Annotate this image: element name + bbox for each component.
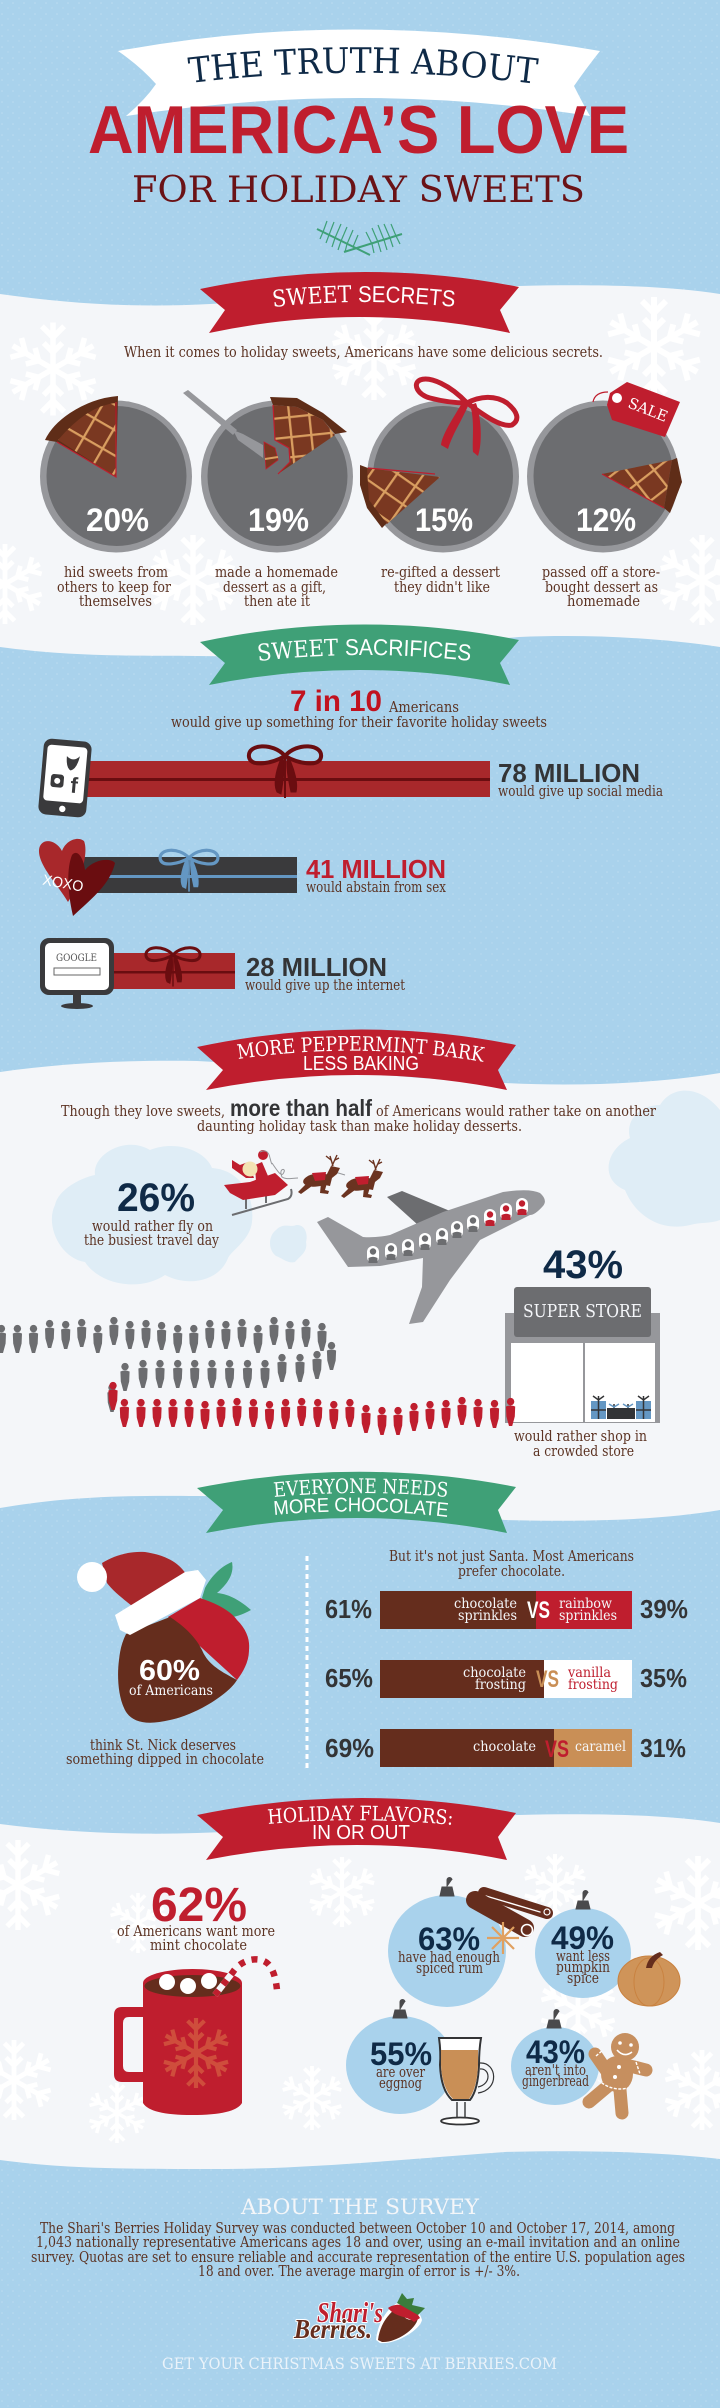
stat: 19% pie with fork — [183, 390, 353, 610]
stat: 43% store: would rather shop in — [514, 1429, 647, 1445]
bow — [146, 948, 200, 986]
intro text: more than half: daunting holiday task than make holiday desserts. — [197, 1119, 522, 1135]
caption: themselves — [79, 594, 152, 610]
comparison: caramel: VS — [545, 1736, 569, 1763]
stat: 26% fly: would rather fly on — [92, 1219, 213, 1235]
caption: dipped in chocolate: something dipped in chocolate — [66, 1752, 264, 1768]
title line 2: AMERICA’S LOVE — [88, 92, 629, 168]
mug snowflake — [161, 2018, 231, 2088]
ornament: 43% gingerbread: 43% — [526, 2034, 585, 2070]
gift bar — [112, 953, 235, 989]
ornament: 49% pumpkin spice: 49% — [551, 1920, 614, 1956]
ornament: 49% pumpkin spice: spice — [567, 1971, 599, 1987]
banner: sweet sacrifices — [200, 624, 519, 685]
ornament: 49% pumpkin spice: want less — [556, 1949, 610, 1965]
call to action: GET YOUR CHRISTMAS SWEETS AT BERRIES.COM — [162, 2354, 557, 2373]
upper wing — [387, 1191, 450, 1225]
intro text: sweet secrets: When it comes to holiday sweets, Americans have some delicious secrets. — [124, 345, 603, 361]
ornament: 49% pumpkin spice: pumpkin — [556, 1960, 610, 1976]
stat: 62% mint chocolate — [117, 1879, 275, 1954]
comparison: frosting: frosting — [475, 1677, 526, 1693]
description: would give up the internet — [245, 978, 405, 994]
value: 78 MILLION — [498, 758, 640, 788]
icon: airplane — [317, 1190, 545, 1324]
intro text: more than half — [61, 1095, 656, 1135]
comparison: sprinkles: chocolate — [454, 1596, 517, 1612]
icon: sale tag: SALE — [626, 394, 670, 426]
title line 3: FOR HOLIDAY SWEETS — [132, 170, 585, 211]
gift bar — [83, 857, 297, 893]
about the survey — [31, 2195, 685, 2280]
candy cane — [215, 1959, 277, 1995]
comparison: frosting — [325, 1660, 687, 1698]
ornament: 55% eggnog: are over — [376, 2065, 425, 2081]
stat: 26% fly: 26% — [117, 1176, 195, 1220]
logo: Shari's Berries — [293, 2293, 425, 2344]
icon: super store — [505, 1287, 660, 1423]
banner: sweet secrets — [200, 272, 519, 333]
comparison intro: But it's not just Santa. Most Americans — [389, 1549, 634, 1565]
stat: 43% store: 43% — [543, 1243, 623, 1287]
pie plate — [201, 400, 353, 552]
caption — [215, 565, 338, 610]
comparison intro — [389, 1549, 634, 1580]
ornament: 43% gingerbread: gingerbread — [522, 2074, 589, 2090]
comparison intro: prefer chocolate. — [458, 1564, 565, 1580]
comparison: caramel: 69% — [325, 1733, 374, 1763]
icon: mug of cocoa — [114, 1959, 277, 2115]
heading: ABOUT THE SURVEY — [240, 2195, 480, 2219]
comparison: sprinkles: sprinkles — [559, 1608, 617, 1624]
icon: fork — [183, 390, 263, 458]
bow — [160, 850, 218, 892]
percentage: 20% — [86, 502, 149, 538]
crowd: red line of shoppers — [108, 1382, 515, 1435]
gifts — [591, 1396, 651, 1419]
comparison: frosting: frosting — [568, 1677, 618, 1693]
white title ribbon — [118, 30, 600, 116]
stat: 20% pie — [40, 396, 192, 610]
value: 28 MILLION — [246, 952, 387, 982]
comparison: sprinkles: rainbow — [559, 1596, 612, 1612]
caption: dessert as a gift, — [223, 580, 326, 596]
percentage: 12% — [576, 502, 636, 538]
bow — [249, 746, 321, 798]
banner line 1: EVERYONE NEEDS — [274, 1478, 447, 1497]
icon: hearts — [39, 839, 115, 916]
banner line 2: MORE CHOCOLATE — [274, 1498, 448, 1517]
icon: pumpkin — [618, 1952, 680, 2006]
caption: hid sweets from — [64, 565, 168, 581]
bar: 28 million internet — [40, 938, 405, 1009]
intro text: more than half: more than half — [230, 1095, 372, 1121]
icon: gingerbread man — [589, 2033, 646, 2113]
banner: holiday flavors — [197, 1798, 516, 1860]
icon: smartphone: f — [69, 773, 79, 798]
stat: 62% mint chocolate: mint chocolate — [150, 1938, 247, 1954]
pie slice — [602, 458, 682, 513]
icon: chocolate strawberry with santa hat — [77, 1552, 251, 1723]
ornament: 43% gingerbread: aren't into — [525, 2063, 586, 2079]
icon: smartphone — [38, 738, 92, 818]
icon: monitor: GOOGLE — [56, 953, 97, 964]
logo: Shari's Berries: Berries. — [293, 2314, 372, 2344]
caption: they didn't like — [394, 580, 490, 596]
chocolate dip — [118, 1617, 237, 1723]
stat: 60% — [139, 1655, 200, 1687]
icon: sale tag — [593, 382, 680, 437]
headline: 7 in 10: 7 in 10 — [290, 685, 382, 718]
ornament: 63% spiced rum — [388, 1878, 550, 2007]
description: would abstain from sex — [306, 880, 446, 896]
icon: super store: SUPER STORE — [523, 1301, 642, 1322]
stat: 62% mint chocolate: of Americans want more — [117, 1924, 275, 1940]
icon: santa sleigh and reindeer — [224, 1150, 383, 1215]
snow band: holiday flavors — [0, 1814, 720, 2169]
comparison: frosting: chocolate — [463, 1665, 526, 1681]
icon: hearts: XOXO — [41, 872, 85, 896]
bar: 41 million sex — [39, 839, 446, 916]
body text: 18 and over. The average margin of error is +/- 3%. — [198, 2264, 520, 2280]
headline: 7 in 10 — [171, 685, 547, 731]
snowflakes: holiday flavors — [0, 1840, 720, 2143]
banner line 1: MORE PEPPERMINT BARK — [236, 1036, 485, 1062]
comparison: caramel: 31% — [640, 1733, 686, 1763]
banner line 2: LESS BAKING — [303, 1053, 419, 1075]
ornament cap — [576, 1890, 590, 1909]
headline: 7 in 10: Americans — [388, 700, 459, 716]
title line 1: THE TRUTH ABOUT — [187, 47, 539, 84]
comparison: frosting: VS — [536, 1666, 559, 1693]
percentage: 19% — [248, 502, 309, 538]
strawberry — [168, 1598, 249, 1680]
caption: passed off a store- — [542, 565, 660, 581]
stat: 43% store — [505, 1243, 660, 1460]
banner title: SWEET SACRIFICES — [258, 638, 470, 661]
cocoa — [144, 1975, 240, 1997]
banner line 2: IN OR OUT — [312, 1822, 410, 1844]
caption — [57, 565, 171, 610]
caption: re-gifted a dessert — [381, 565, 500, 581]
body text — [31, 2221, 685, 2280]
snow band: sweet secrets — [0, 285, 720, 656]
clouds — [52, 1091, 720, 1284]
icon: eggnog glass — [439, 2038, 494, 2124]
passenger windows — [367, 1215, 479, 1263]
icon: pine sprigs — [317, 221, 402, 255]
caption: made a homemade — [215, 565, 338, 581]
pie plate — [40, 400, 192, 552]
ornament: 63% spiced rum: 63% — [418, 1921, 480, 1957]
icon: chocolate strawberry with santa hat: of Americans — [129, 1683, 213, 1699]
comparison: sprinkles: 61% — [325, 1594, 372, 1624]
caption: dipped in chocolate: think St. Nick deserves — [90, 1738, 236, 1754]
marshmallows — [159, 1974, 175, 1990]
percentage: 15% — [415, 502, 473, 538]
comparison: frosting: vanilla — [567, 1665, 611, 1681]
pie plate — [367, 400, 519, 552]
pom pom — [77, 1562, 107, 1592]
ornament: 63% spiced rum: spiced rum — [416, 1961, 483, 1977]
pie bite — [264, 442, 278, 469]
bar: 78 million social media — [38, 738, 663, 818]
leaves — [202, 1562, 251, 1617]
handle — [114, 2007, 143, 2082]
snow band: peppermint bark — [0, 1061, 720, 1521]
comparison: frosting: 35% — [640, 1663, 687, 1693]
banner line 1: HOLIDAY FLAVORS: — [268, 1806, 452, 1825]
comparison: frosting: 65% — [325, 1663, 373, 1693]
ornament: 55% eggnog: 55% — [370, 2036, 432, 2072]
caption — [542, 565, 660, 610]
ornament: 55% eggnog — [346, 2000, 494, 2124]
caption: homemade — [567, 594, 640, 610]
stat: 26% fly — [84, 1176, 220, 1249]
body — [143, 1983, 242, 2115]
ornament: 43% gingerbread — [511, 2010, 646, 2113]
ornament cap — [393, 2000, 407, 2018]
intro text: more than half: of Americans would rather take on another — [376, 1104, 656, 1120]
comparison: caramel: chocolate — [473, 1739, 536, 1755]
intro text: more than half: Though they love sweets, — [61, 1104, 225, 1120]
logo: Shari's Berries: Shari's — [317, 2297, 383, 2329]
comparison: caramel: caramel — [575, 1739, 626, 1755]
hat brim — [115, 1570, 206, 1635]
stat: 62% mint chocolate: 62% — [151, 1879, 247, 1932]
icon: star anise — [487, 1922, 519, 1954]
headline: 7 in 10: would give up something for their favorite holiday sweets — [171, 715, 547, 731]
pie slice — [45, 396, 118, 477]
stat: 15% pie with bow — [360, 379, 519, 596]
banner: everyone needs more chocolate — [197, 1472, 516, 1533]
comparison: caramel — [325, 1729, 686, 1767]
icon: cinnamon sticks — [475, 1893, 550, 1936]
caption: others to keep for — [57, 580, 171, 596]
comparison: sprinkles: VS — [527, 1597, 550, 1624]
caption — [381, 565, 500, 596]
icon: monitor — [40, 938, 114, 1009]
pie plate — [527, 400, 679, 552]
stat: 43% store: a crowded store — [533, 1444, 634, 1460]
comparison: sprinkles: sprinkles — [458, 1608, 517, 1624]
caption: dipped in chocolate — [66, 1738, 264, 1768]
stat: 12% pie with tag — [527, 382, 682, 610]
ornament: 49% pumpkin spice — [535, 1890, 680, 2006]
banner title: SWEET SECRETS — [273, 285, 455, 307]
stat: 26% fly: the busiest travel day — [84, 1233, 220, 1249]
comparison: sprinkles — [325, 1591, 688, 1629]
ornament: 55% eggnog: eggnog — [379, 2076, 422, 2092]
ornament cap — [440, 1878, 454, 1896]
caption: bought dessert as — [545, 580, 658, 596]
description: would give up social media — [498, 784, 663, 800]
pie slice — [270, 397, 347, 474]
ornament cap — [547, 2010, 561, 2028]
caption: then ate it — [244, 594, 310, 610]
santa hat — [102, 1552, 186, 1606]
fuselage and lower wing — [317, 1190, 545, 1324]
icon: red bow — [416, 379, 517, 456]
title block — [88, 30, 629, 256]
ornament: 63% spiced rum: have had enough — [398, 1950, 500, 1966]
pie slice — [360, 465, 440, 528]
comparison: sprinkles: 39% — [640, 1594, 688, 1624]
snowflakes: sweet secrets — [0, 297, 720, 625]
crowd: gray line of shoppers — [0, 1317, 336, 1412]
banner: more peppermint bark — [197, 1030, 516, 1090]
value: 41 MILLION — [306, 854, 446, 884]
gift bar — [87, 761, 490, 797]
